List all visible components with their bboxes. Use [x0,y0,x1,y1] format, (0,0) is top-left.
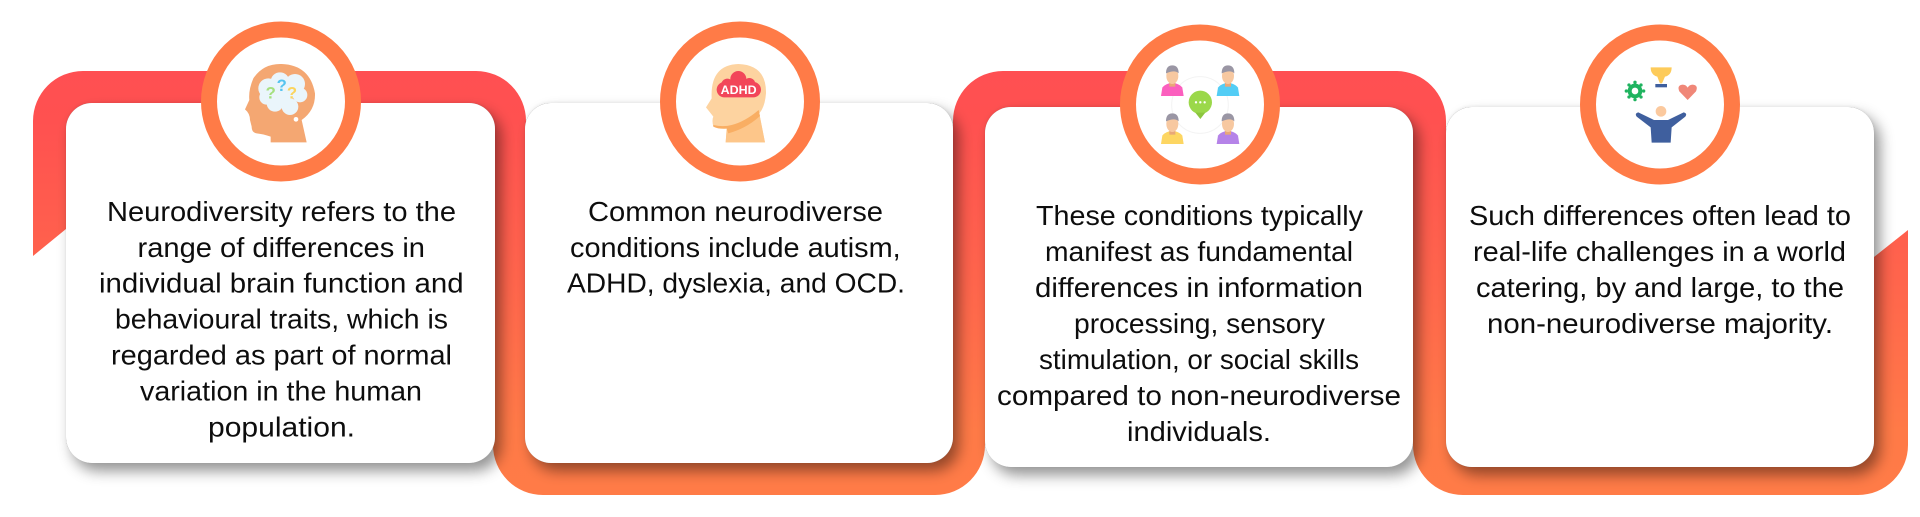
card 1 text: variation in the human [140,376,422,407]
card 1 text [99,196,464,443]
card 1 text: population. [208,412,355,443]
icon ring 3 [1128,32,1272,176]
card 1 text: Neurodiversity refers to the [107,196,456,227]
card 4 text [1469,200,1851,339]
card 4 background [1446,107,1874,467]
panel: card 4 real-life challenges [1446,32,1874,467]
card 3 text: differences in information [1035,272,1363,303]
card 2 text [567,196,905,299]
card 3 text: stimulation, or social skills [1039,344,1359,375]
card 2 text: conditions include autism, [570,232,901,263]
card 3 text: processing, sensory [1074,308,1325,339]
card 3 text: manifest as fundamental [1045,236,1353,267]
card 1 text: range of differences in [138,232,425,263]
icon ring 2 [668,30,812,174]
icon ring 1 [209,30,353,174]
card 3 background [985,107,1413,467]
panel: card 1 neurodiversity definition [66,30,495,463]
panel: card 3 manifestation [985,32,1413,467]
icon: head with question marks: ? [277,76,287,95]
card 3 text [997,200,1401,447]
card 3 text: individuals. [1127,416,1271,447]
card 2 text: Common neurodiverse [588,196,883,227]
card 3 text: compared to non-neurodiverse [997,380,1401,411]
card 4 text: catering, by and large, to the [1476,272,1844,303]
icon: head with ADHD cloud [706,64,766,142]
icon: head with question marks: ? [287,83,297,102]
card 1 text: behavioural traits, which is [115,304,448,335]
card 2 text: ADHD, dyslexia, and OCD. [567,268,905,299]
icon ring 4 [1588,32,1732,176]
icon: head with question marks [245,64,315,142]
card 2 background [525,103,953,463]
icon: four people around speech bubble [1161,65,1239,144]
panel: card 2 common conditions [525,30,953,463]
card 4 text: real-life challenges in a world [1473,236,1846,267]
icon: head with ADHD cloud: ADHD [721,83,757,97]
icon: person juggling trophy, gear and heart [1625,67,1697,143]
card 1 background [66,103,495,463]
card 4 text: Such differences often lead to [1469,200,1851,231]
icon: head with question marks: ? [266,83,276,102]
card 3 text: These conditions typically [1036,200,1363,231]
card 1 text: individual brain function and [99,268,464,299]
card 1 text: regarded as part of normal [111,340,452,371]
card 4 text: non-neurodiverse majority. [1487,308,1833,339]
